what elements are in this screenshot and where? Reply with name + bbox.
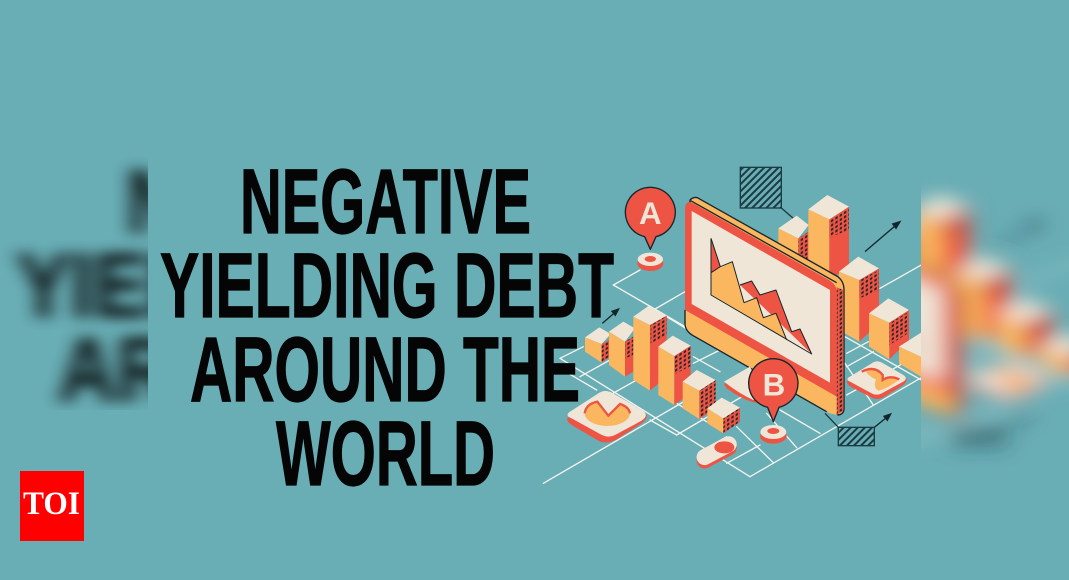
title: WORLD (276, 403, 495, 505)
TOI logo (20, 471, 84, 541)
title: NEGATIVE (240, 151, 531, 253)
title: AROUND THE (190, 319, 580, 421)
profile tile (847, 361, 907, 399)
pin B: B (763, 368, 785, 403)
TOI logo: TOI (23, 486, 80, 522)
isometric grid (543, 260, 930, 483)
blurred illustration backdrop, right (921, 185, 1069, 456)
monitor line chart (711, 238, 812, 354)
blurred title backdrop, left: NEGATIVE (127, 149, 529, 253)
pin B (749, 359, 798, 444)
arrows (602, 222, 900, 427)
blurred title backdrop, left (8, 161, 148, 410)
toggle pill (696, 436, 737, 468)
hatched square, top (740, 167, 793, 218)
hatched square, bottom (825, 413, 874, 446)
pin A (625, 187, 675, 271)
blurred title backdrop, left: YIELDING DEBT (17, 233, 644, 337)
title (160, 151, 614, 505)
blurred title backdrop, left: AROUND THE (58, 317, 597, 421)
monitor (685, 197, 844, 415)
pie tile (567, 391, 647, 442)
title: YIELDING DEBT (160, 235, 614, 337)
front-left buildings (585, 306, 740, 433)
tile behind pin B (724, 366, 758, 403)
back buildings (778, 195, 933, 377)
illustration (543, 167, 933, 483)
pin A: A (639, 196, 662, 231)
